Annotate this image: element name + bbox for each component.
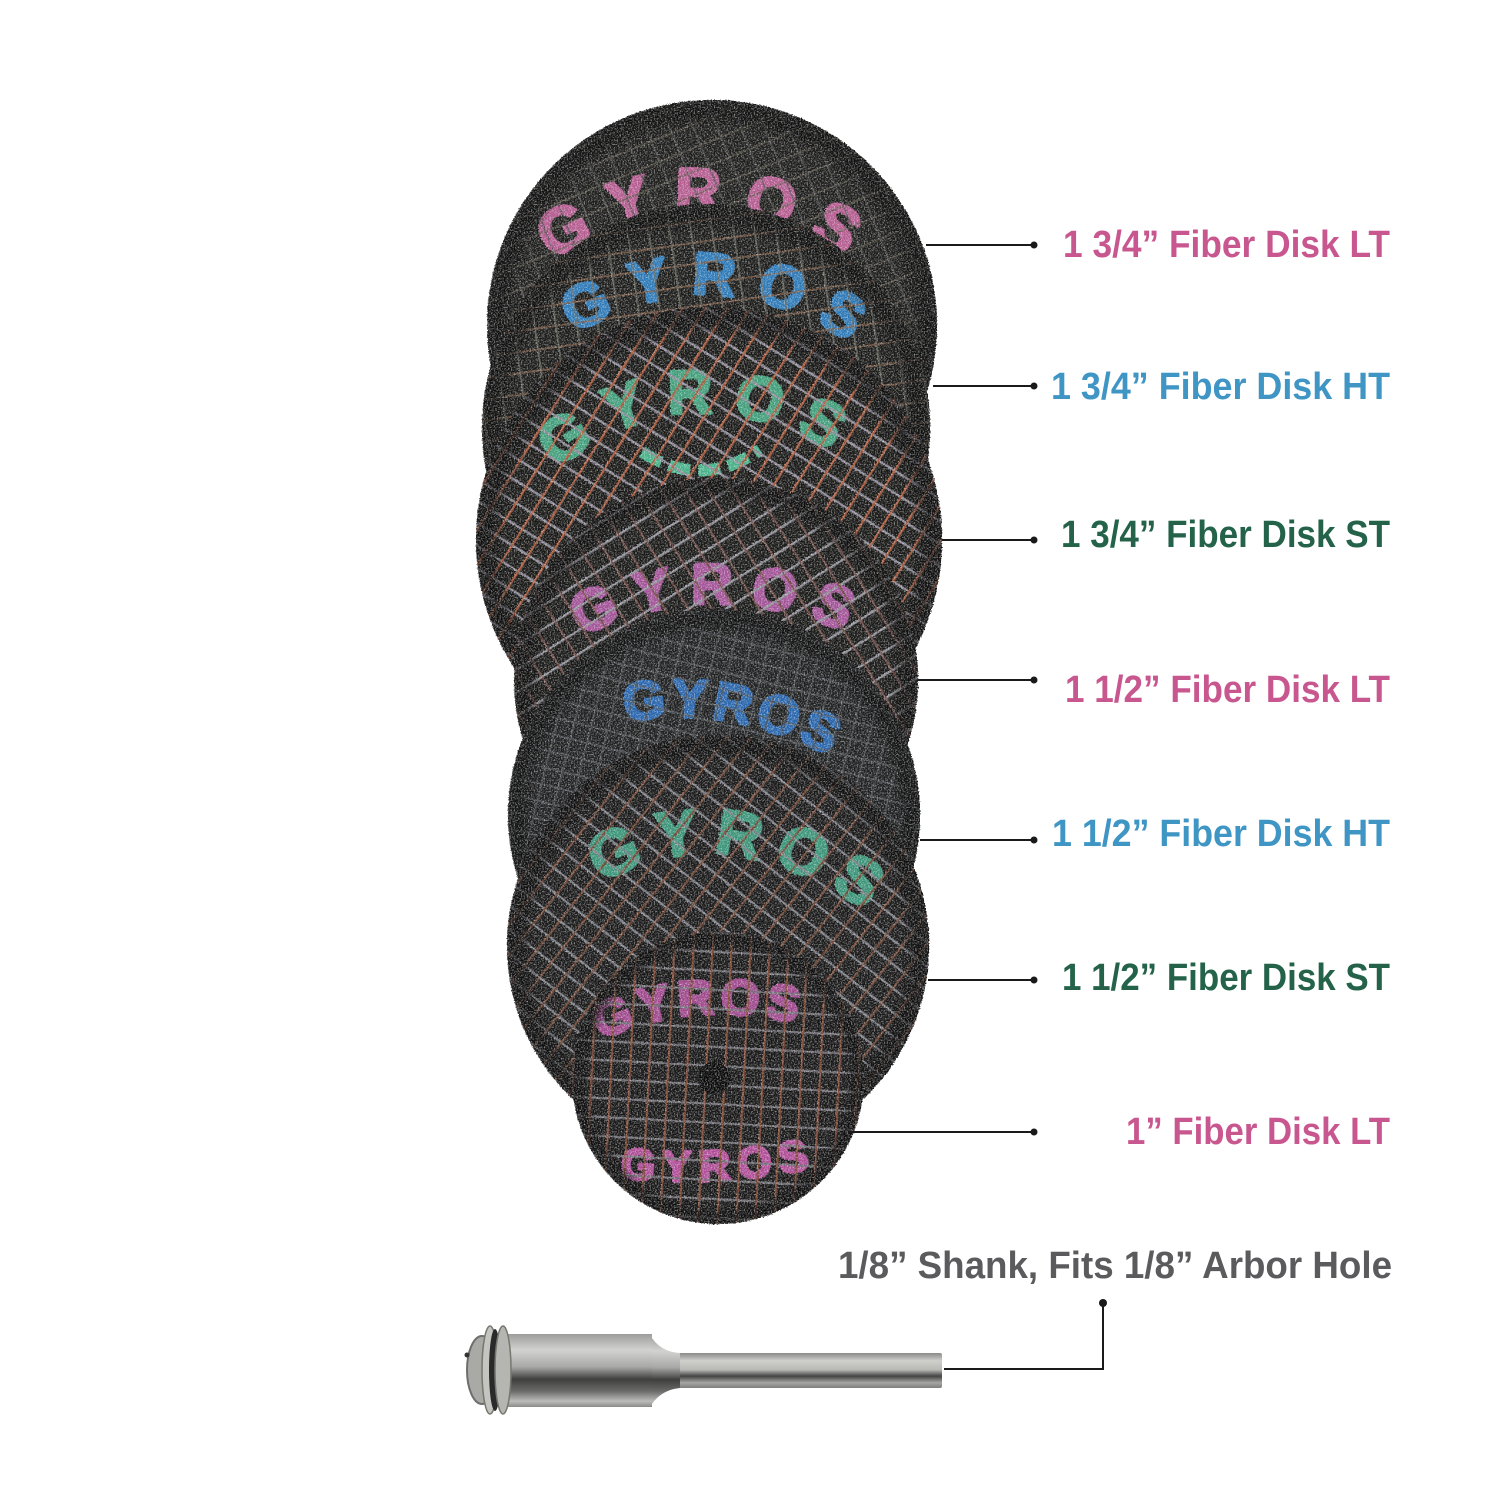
label: 1 3/4 ST: 1 3/4” Fiber Disk ST	[1061, 514, 1390, 556]
disk: 1 3/4 inch HT: GYROS	[562, 250, 866, 338]
taper	[650, 1335, 680, 1407]
leader: 1 1/2 ST	[928, 976, 1038, 984]
label: 1 3/4 LT: 1 3/4” Fiber Disk LT	[1063, 224, 1390, 266]
disk: 1 1/2 inch ST: GYROS	[588, 808, 883, 906]
o-ring	[489, 1329, 501, 1411]
leader: 1 3/4 HT	[933, 382, 1038, 390]
label: 1 3/4 HT: 1 3/4” Fiber Disk HT	[1051, 366, 1390, 408]
disk: 1 1/2 inch ST	[506, 734, 930, 1100]
disk: 1 3/4 inch ST	[476, 306, 943, 668]
head screw	[467, 1336, 497, 1404]
leader: 1 3/4 ST	[942, 536, 1038, 544]
label: 1 1/2 LT: 1 1/2” Fiber Disk LT	[1065, 669, 1390, 711]
washer outer	[482, 1326, 498, 1414]
label: 1 1/2 ST: 1 1/2” Fiber Disk ST	[1062, 957, 1390, 999]
disk: 1 inch LT: GYROS	[592, 978, 800, 1036]
disk: 1 3/4 inch HT	[481, 203, 930, 472]
leader lines	[850, 242, 1107, 1369]
label: shank: 1/8” Shank, Fits 1/8” Arbor Hole	[838, 1245, 1392, 1287]
disk: 1 inch LT: GYROS	[621, 1138, 810, 1184]
disk: 1 3/4 inch LT	[486, 100, 938, 392]
disk: 1 1/2 inch LT: GYROS	[570, 562, 854, 632]
mandrel shank	[464, 1326, 942, 1414]
washer inner	[495, 1326, 511, 1414]
leader: 1 1/2 LT	[918, 676, 1038, 684]
disk: 1 1/2 inch HT: GYROS	[623, 677, 841, 753]
label: 1 inch LT: 1” Fiber Disk LT	[1126, 1111, 1390, 1153]
disk stack	[476, 100, 943, 1225]
leader: 1 1/2 HT	[920, 836, 1038, 844]
screw slot	[464, 1352, 470, 1358]
leader: 1 inch LT	[850, 1128, 1038, 1136]
disk: 1 3/4 inch ST: GYROS	[539, 368, 846, 463]
leader: 1 3/4 LT	[926, 242, 1038, 248]
disk: 1 inch LT	[572, 932, 864, 1225]
label: 1 1/2 HT: 1 1/2” Fiber Disk HT	[1052, 813, 1390, 855]
leader: shank	[944, 1299, 1107, 1369]
body	[508, 1334, 652, 1407]
disk: 1 1/2 inch LT	[513, 478, 919, 744]
disk: 1 3/4 inch LT: GYROS	[538, 166, 861, 255]
rod	[672, 1353, 942, 1388]
disk: 1 1/2 inch HT	[507, 608, 920, 878]
